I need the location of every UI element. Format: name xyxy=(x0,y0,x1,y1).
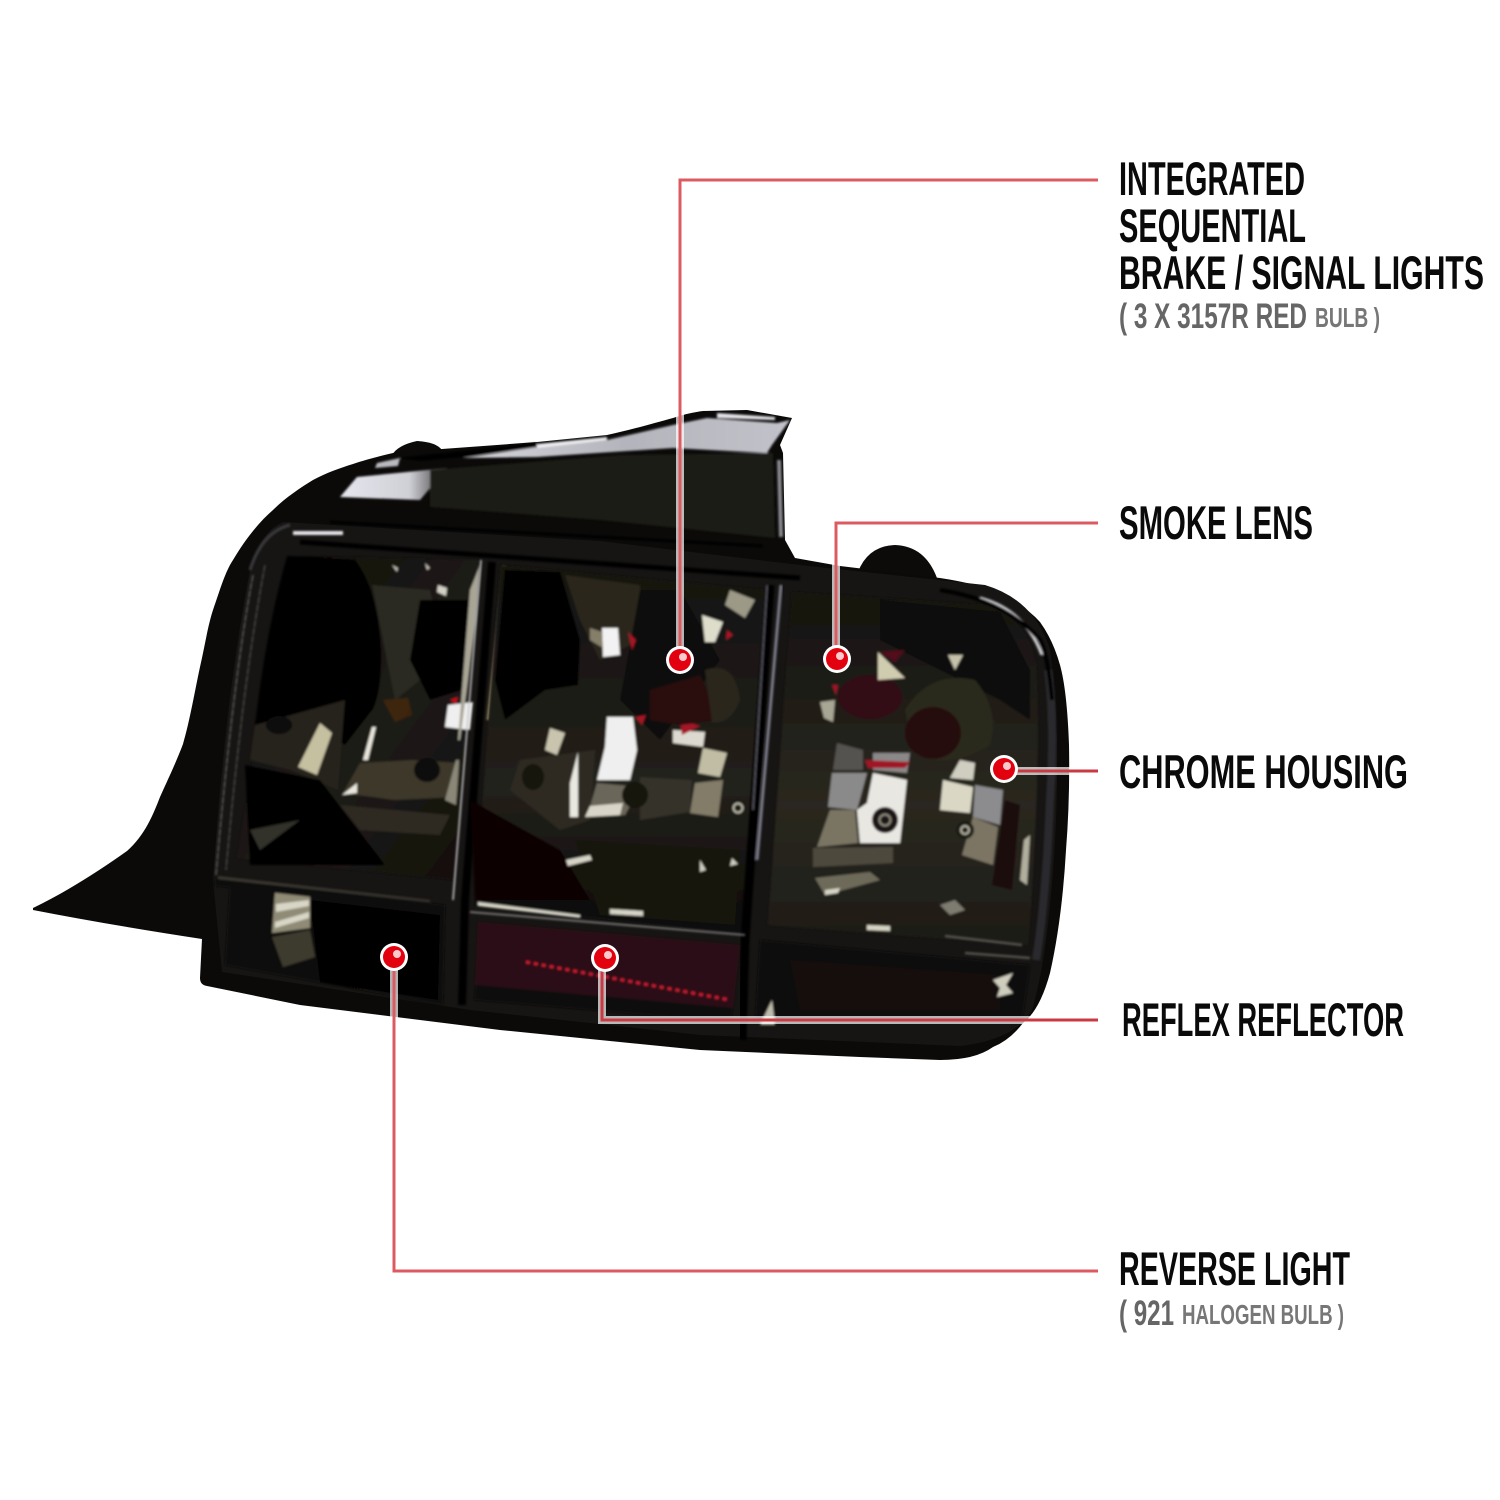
tail light lamp xyxy=(33,410,1069,1060)
callout: integrated sequential brake / signal lights: SEQUENTIAL xyxy=(1119,199,1306,252)
divider left-middle xyxy=(453,560,504,1005)
callout: integrated sequential brake / signal lights xyxy=(1119,152,1484,336)
upper fin and gloss highlights xyxy=(340,413,790,538)
lower left reverse panel xyxy=(215,876,445,1005)
leader: chrome housing xyxy=(1004,767,1098,775)
left lens panel xyxy=(237,556,480,880)
marker dot: integrated sequential xyxy=(666,646,694,674)
marker dot: chrome housing xyxy=(990,755,1018,783)
leader: reverse light xyxy=(394,958,1098,1271)
marker dot: smoke lens xyxy=(823,645,851,673)
middle lens panel xyxy=(470,565,765,935)
marker dot: reverse light xyxy=(380,943,408,971)
marker dot: reflex reflector xyxy=(591,944,619,972)
callout: integrated sequential brake / signal lights: BULB ) xyxy=(1315,302,1380,333)
callout: smoke lens: SMOKE LENS xyxy=(1119,496,1313,549)
right lens panel xyxy=(768,592,1038,945)
callout: reverse light xyxy=(1119,1242,1350,1333)
lamp body silhouette xyxy=(33,410,1069,1060)
callout: reverse light: ( 921 xyxy=(1119,1294,1174,1333)
divider middle-right xyxy=(742,585,781,1040)
lower right panel xyxy=(755,936,1030,1025)
leader: smoke lens xyxy=(836,523,1098,660)
leader: reflex reflector xyxy=(602,958,1098,1020)
lower reflector panel xyxy=(470,912,745,1022)
callout: reverse light: REVERSE LIGHT xyxy=(1119,1242,1350,1295)
callout: reverse light: HALOGEN BULB ) xyxy=(1182,1299,1344,1330)
callout: integrated sequential brake / signal lights: INTEGRATED xyxy=(1119,152,1305,205)
lamp rear mounting bumps xyxy=(392,441,937,578)
lens frame xyxy=(213,522,1057,1046)
callout: integrated sequential brake / signal lights: ( 3 X 3157R RED xyxy=(1119,297,1307,336)
leader: integrated sequential xyxy=(680,180,1098,660)
lens frame highlights xyxy=(216,522,1052,960)
